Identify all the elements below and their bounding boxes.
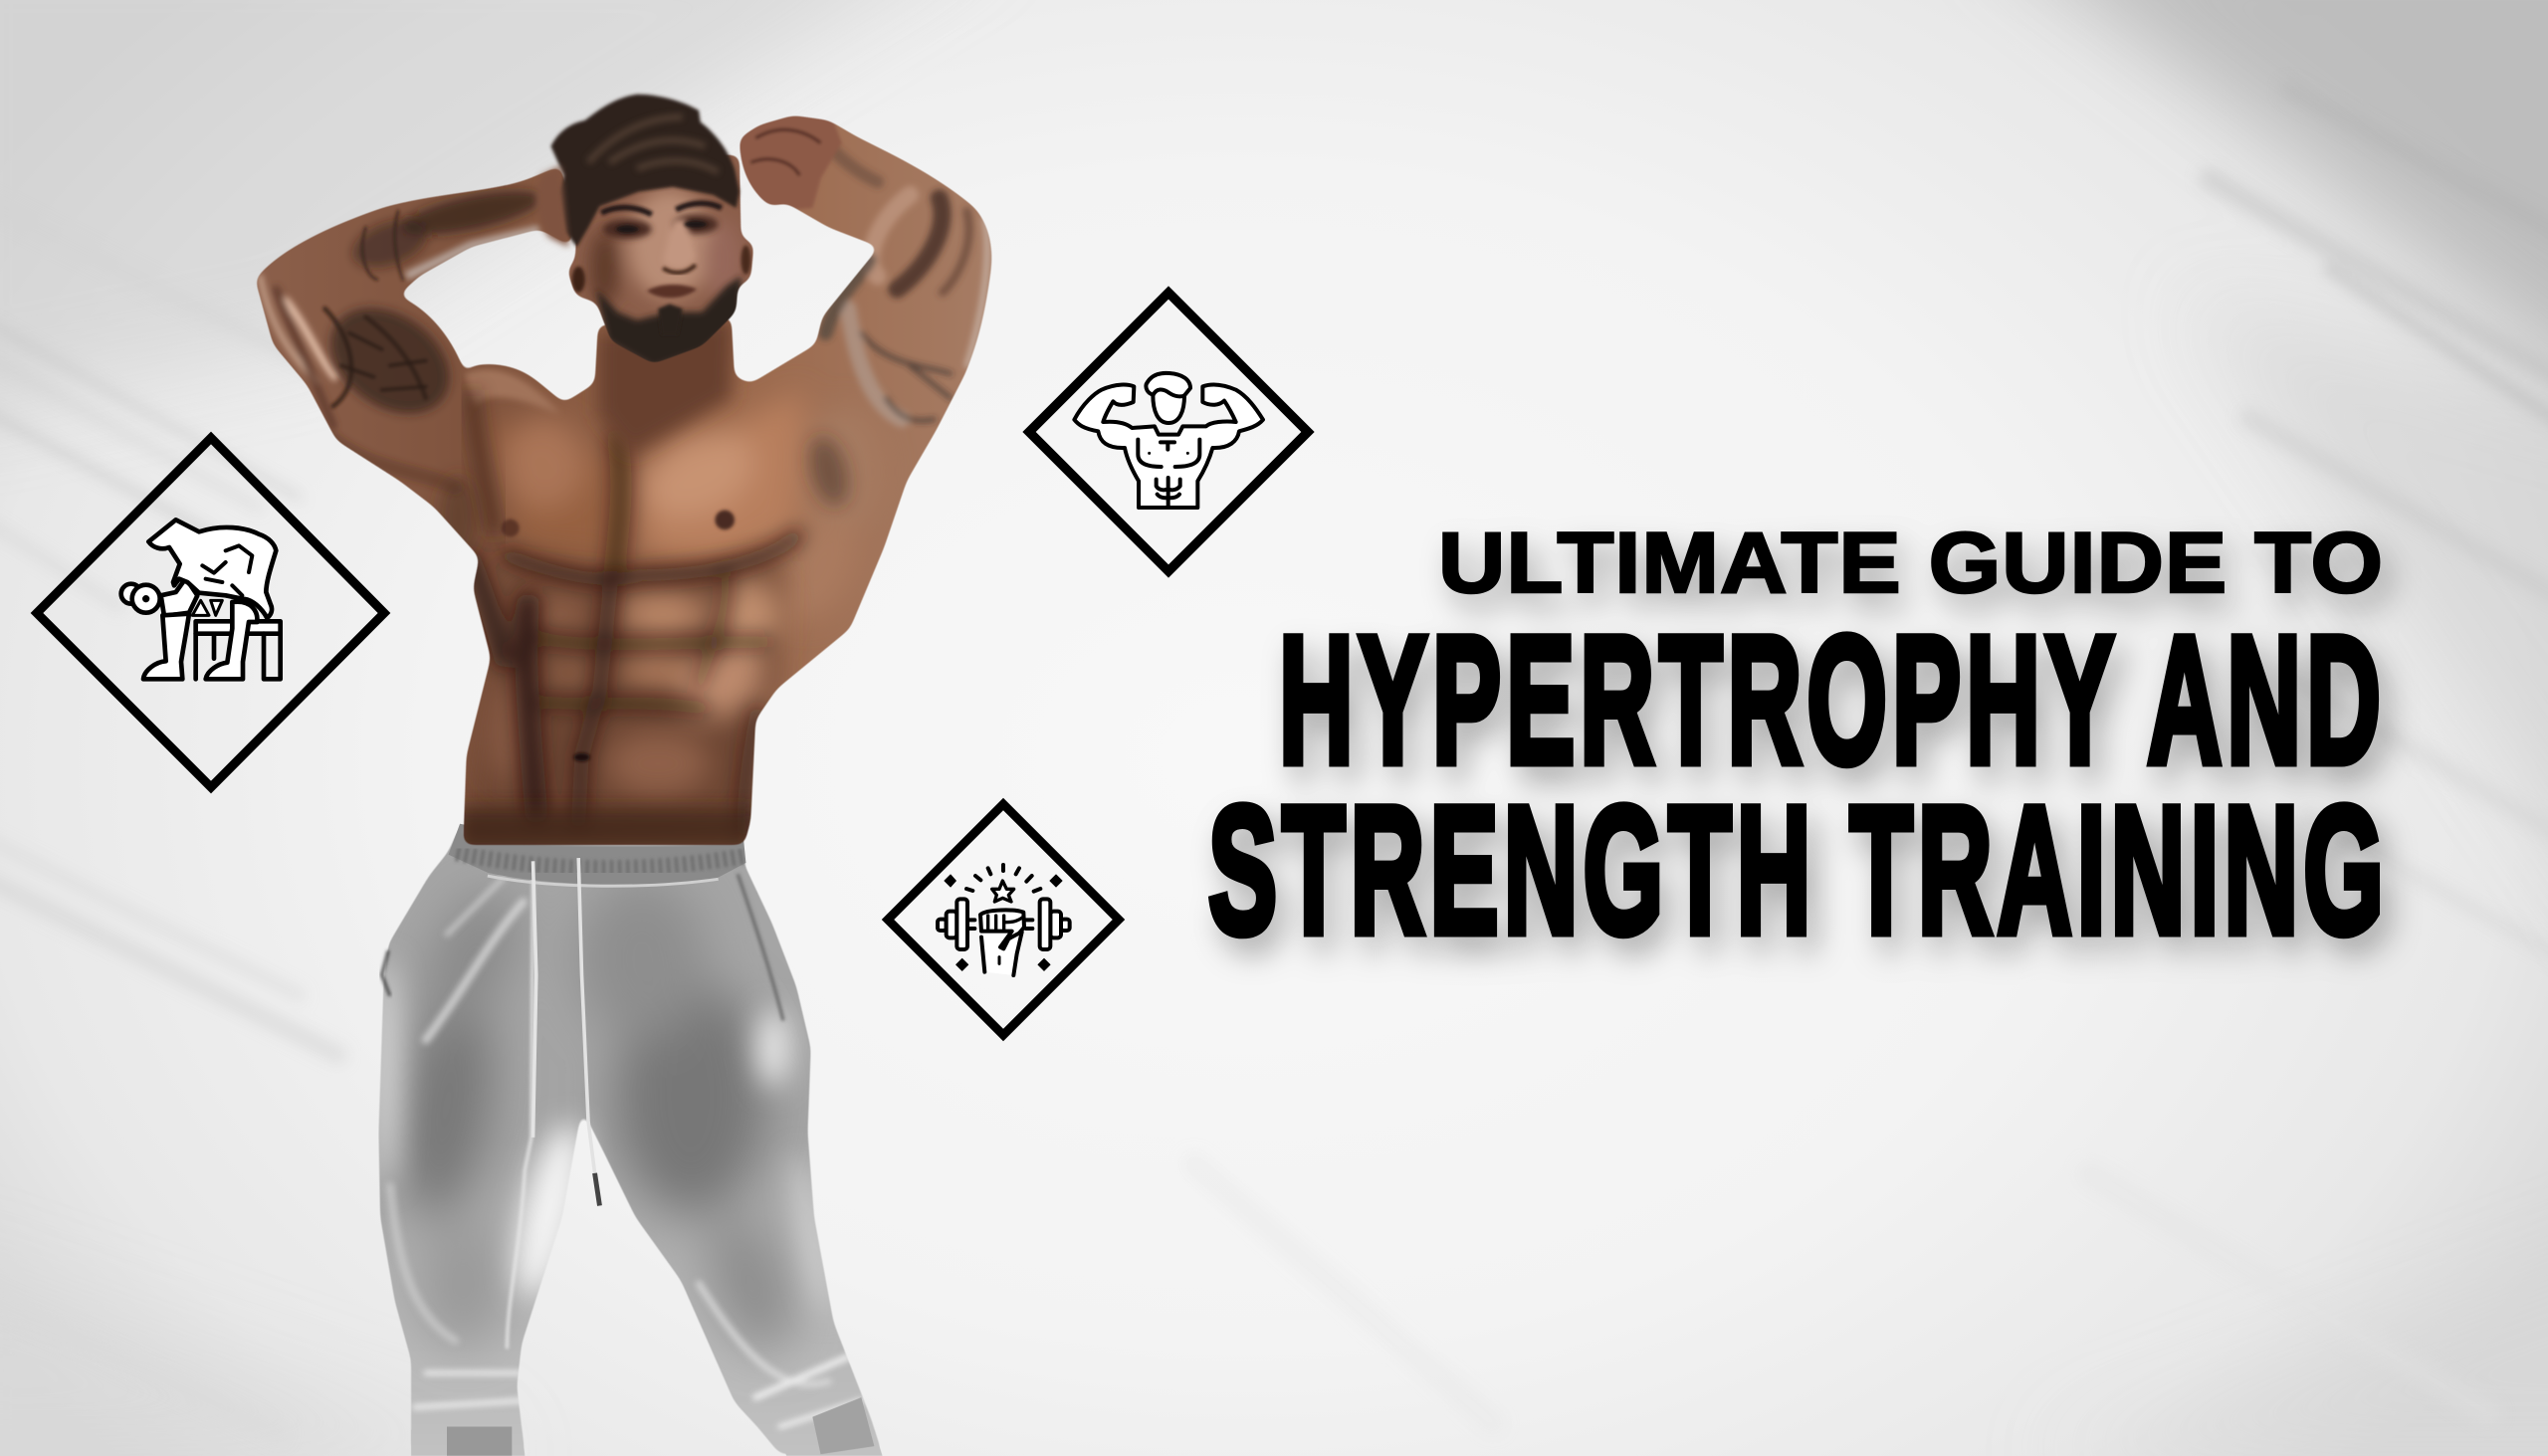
- ears: [572, 267, 585, 293]
- title: [1208, 516, 2389, 971]
- left arm tattoos: [311, 182, 544, 435]
- pocket: [738, 874, 783, 1020]
- navel: [573, 753, 590, 761]
- diamond icon: fist with dumbbell: [888, 804, 1119, 1035]
- eyes and brows: [601, 203, 722, 233]
- left arm highlights: [260, 277, 455, 488]
- flexing figure: [1074, 373, 1263, 508]
- shoulder crease: [471, 390, 496, 536]
- right arm muscle and tattoo: [821, 138, 987, 421]
- diamond icon: seated dumbbell curl: [37, 438, 384, 787]
- torso and arms: [228, 98, 1007, 861]
- diamond icon: flexing bodybuilder: [1029, 293, 1308, 571]
- figure: muscular man in grey joggers: [228, 95, 1007, 1456]
- nose: [663, 219, 696, 268]
- beard: [596, 277, 742, 367]
- waistband: [449, 824, 745, 886]
- abdomen base: [467, 560, 780, 821]
- head: [536, 95, 763, 374]
- left pocket: [382, 950, 390, 996]
- title line: ultimate guide to: ULTIMATE GUIDE TO: [1438, 516, 2384, 611]
- right hand: [732, 110, 842, 211]
- muscle shadows: [471, 439, 796, 829]
- left hand: [536, 166, 568, 247]
- mouth: [647, 285, 697, 298]
- hair: [550, 95, 740, 247]
- pecs: [490, 394, 862, 610]
- drawstrings: [533, 858, 599, 1205]
- seam: [507, 869, 533, 1349]
- joggers: [378, 832, 882, 1456]
- armpit: [439, 432, 855, 557]
- curl figure: [121, 520, 281, 679]
- abs highlights: [485, 578, 783, 796]
- nipples: [502, 511, 735, 537]
- fist and dumbbell: [938, 865, 1070, 975]
